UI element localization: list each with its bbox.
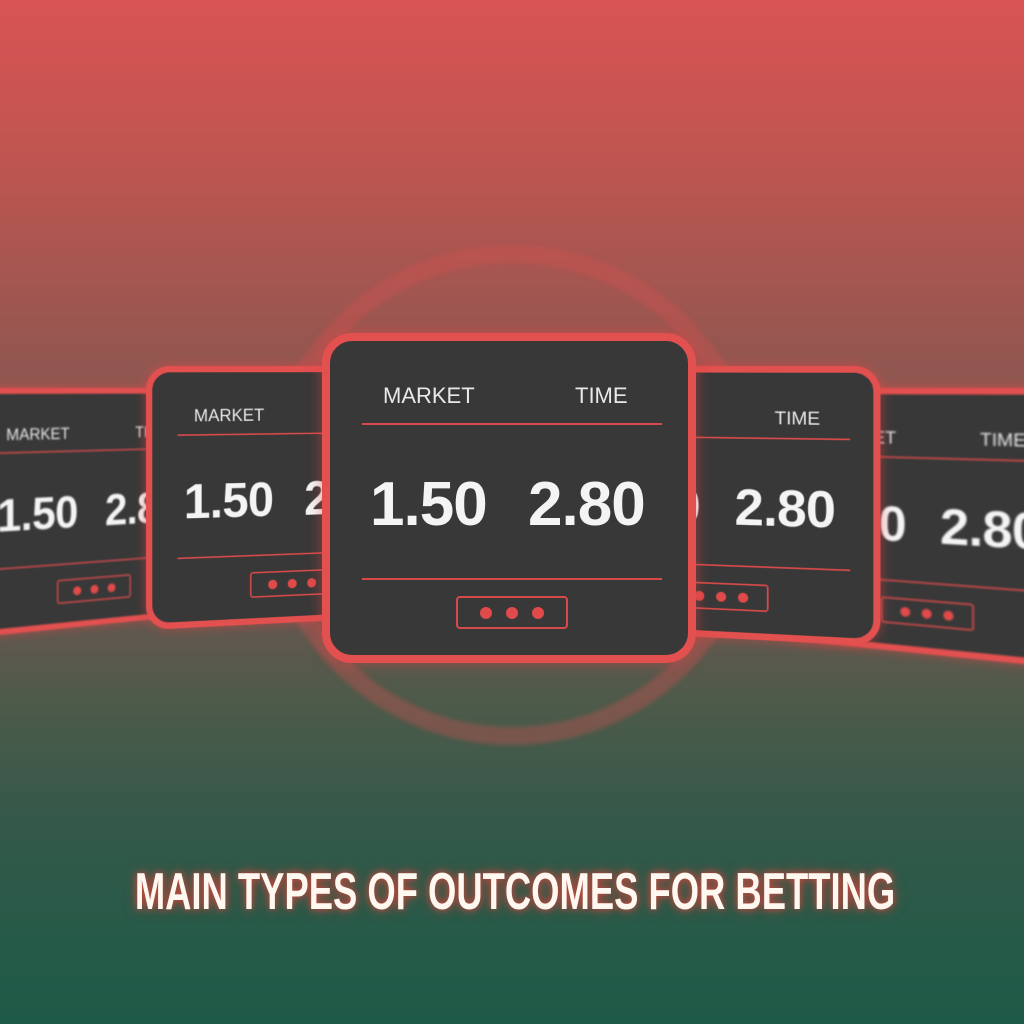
card: far left	[0, 388, 210, 639]
labels	[383, 383, 628, 408]
card: center: 2.80	[528, 470, 645, 539]
card: far left: TIME	[135, 423, 168, 441]
card: left: 1.50	[184, 473, 273, 530]
card: far right	[778, 388, 1024, 671]
card: left: 2.80	[304, 470, 389, 526]
glow ring	[262, 245, 762, 745]
card: right	[566, 366, 880, 646]
icon: dots button	[456, 596, 568, 629]
card: left: MARKET	[194, 405, 264, 425]
card: far right: 1.50	[814, 494, 906, 553]
card: right: 2.80	[735, 479, 835, 539]
card: right: TIME	[775, 408, 820, 429]
title: MAIN TYPES OF OUTCOMES FOR BETTING	[135, 863, 895, 921]
card: center	[322, 333, 696, 663]
card: far left: MARKET	[6, 424, 70, 444]
card: center: TIME	[575, 383, 628, 408]
card: center: MARKET	[383, 383, 475, 408]
card: right: MARKET	[615, 406, 690, 427]
card: far left: 2.80	[105, 483, 179, 535]
card: left	[146, 366, 426, 630]
card: right: 1.50	[604, 476, 700, 535]
card: left: TIME	[339, 404, 377, 424]
odds	[370, 470, 645, 539]
card: center: 1.50	[370, 470, 487, 539]
card: far right: MARKET	[824, 427, 896, 448]
